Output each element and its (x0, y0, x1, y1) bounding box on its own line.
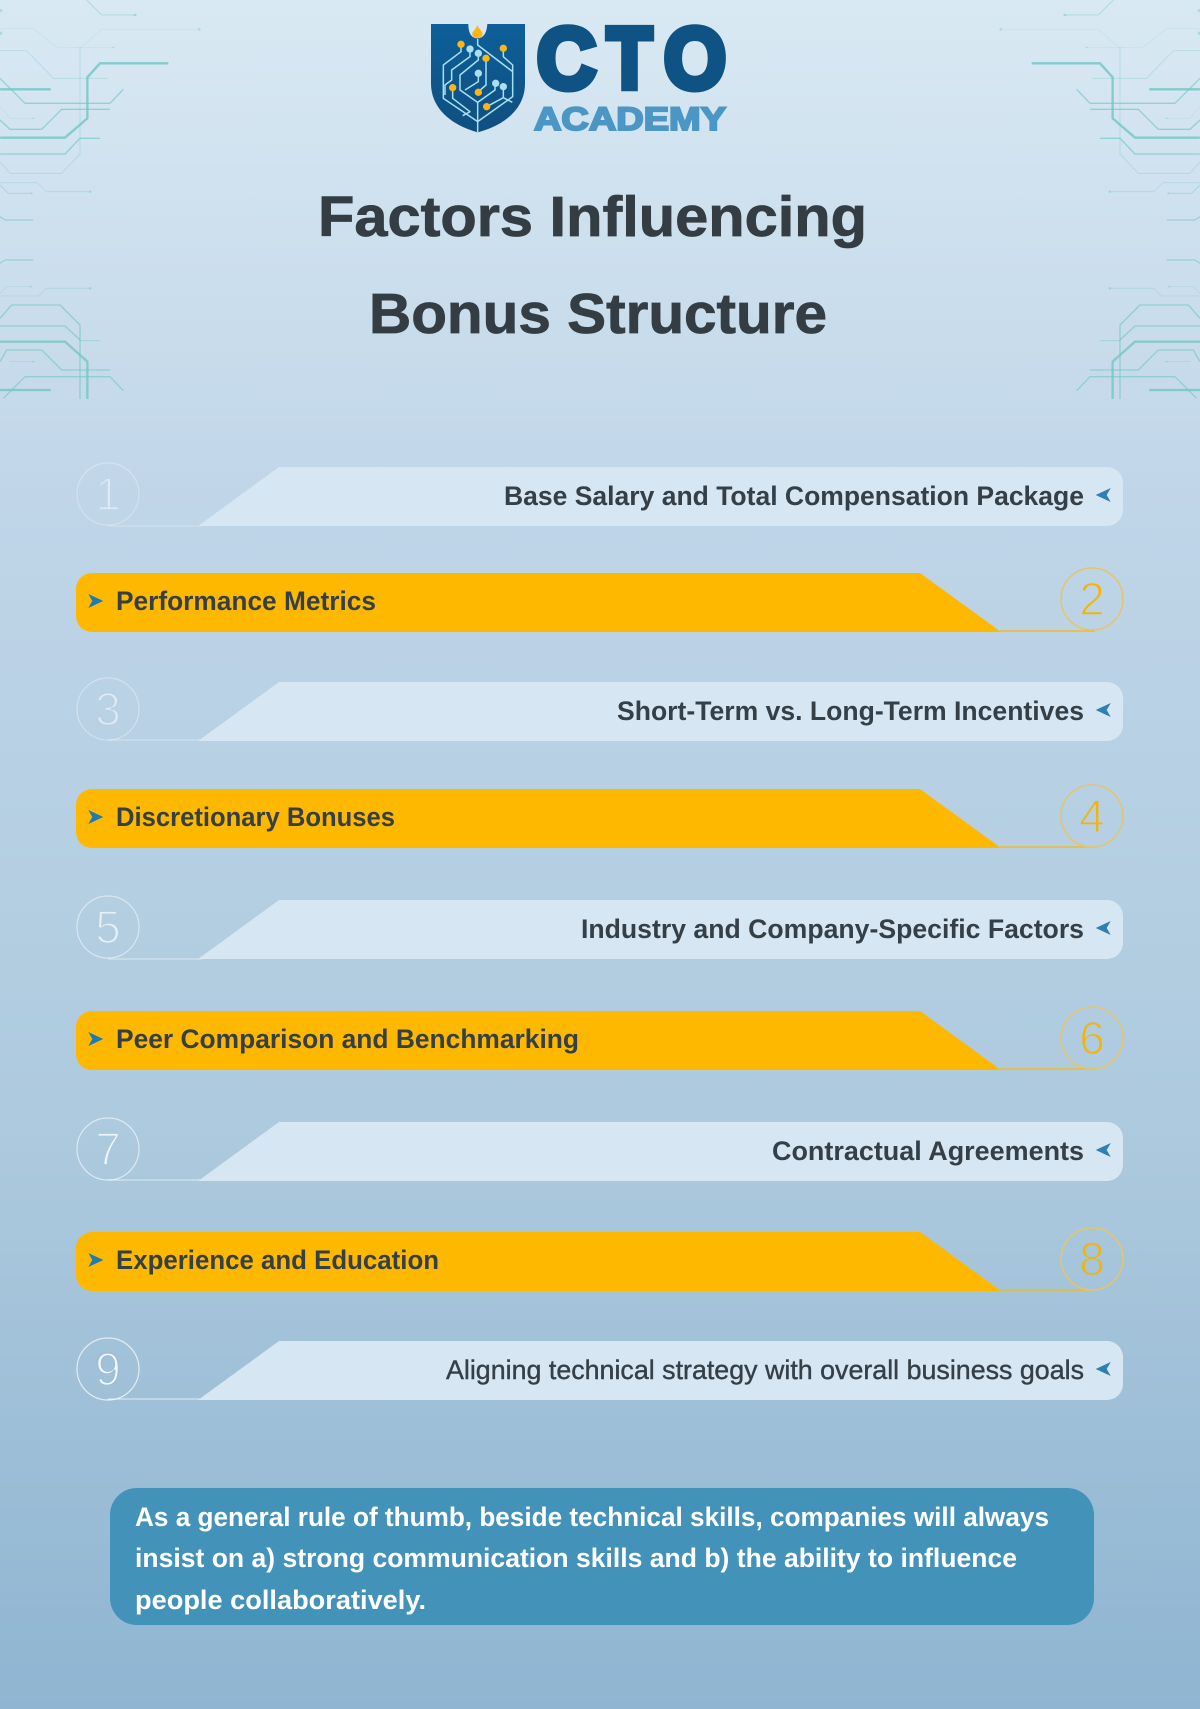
factor 1: 1 (95, 468, 121, 520)
factor 7: Contractual Agreements (772, 1136, 1084, 1166)
title: Bonus Structure (369, 282, 827, 346)
factor 9 (77, 1338, 1123, 1400)
logo wordmark CTO: C (537, 11, 596, 107)
factor 2 (76, 568, 1123, 632)
logo (431, 11, 726, 137)
factor 9: Aligning technical strategy with overall business goals (446, 1355, 1084, 1385)
callout (110, 1488, 1094, 1625)
circuit decoration: left (0, 0, 201, 399)
circuit decoration: right (999, 0, 1200, 399)
factor 5 (77, 896, 1123, 959)
factor 5: Industry and Company-Specific Factors (581, 914, 1084, 944)
factor 7 (77, 1118, 1123, 1181)
factor 8 (76, 1228, 1123, 1291)
logo wordmark CTO: O (664, 11, 726, 107)
factor 6 (76, 1007, 1123, 1070)
factor 9: 9 (95, 1343, 121, 1395)
factor 6: Peer Comparison and Benchmarking (116, 1024, 579, 1054)
logo shield icon (431, 24, 525, 132)
factor 1: Base Salary and Total Compensation Package (504, 481, 1084, 511)
factor 3 (77, 678, 1123, 741)
factor 8: Experience and Education (116, 1245, 439, 1275)
callout: insist on a) strong communication skills and b) the ability to influence (135, 1543, 1017, 1573)
factor 3: 3 (95, 683, 121, 735)
factor 5: 5 (95, 901, 121, 953)
logo wordmark ACADEMY: ACADEMY (534, 101, 726, 137)
factor 4 (76, 785, 1123, 848)
callout: people collaboratively. (135, 1585, 426, 1615)
factor 2: 2 (1079, 573, 1105, 625)
factor 1 (77, 463, 1123, 526)
factor 7: 7 (95, 1123, 121, 1175)
callout: As a general rule of thumb, beside technical skills, companies will always (135, 1502, 1049, 1532)
factor 8: 8 (1079, 1233, 1105, 1285)
logo wordmark CTO: T (607, 11, 652, 107)
factor 2: Performance Metrics (116, 586, 376, 616)
title: Factors Influencing (318, 185, 867, 249)
factor 4: 4 (1079, 790, 1105, 842)
factor 3: Short-Term vs. Long-Term Incentives (617, 696, 1084, 726)
factor 4: Discretionary Bonuses (116, 802, 395, 832)
factor 6: 6 (1079, 1012, 1105, 1064)
title (318, 185, 867, 346)
logo wordmark CTO (537, 11, 726, 107)
